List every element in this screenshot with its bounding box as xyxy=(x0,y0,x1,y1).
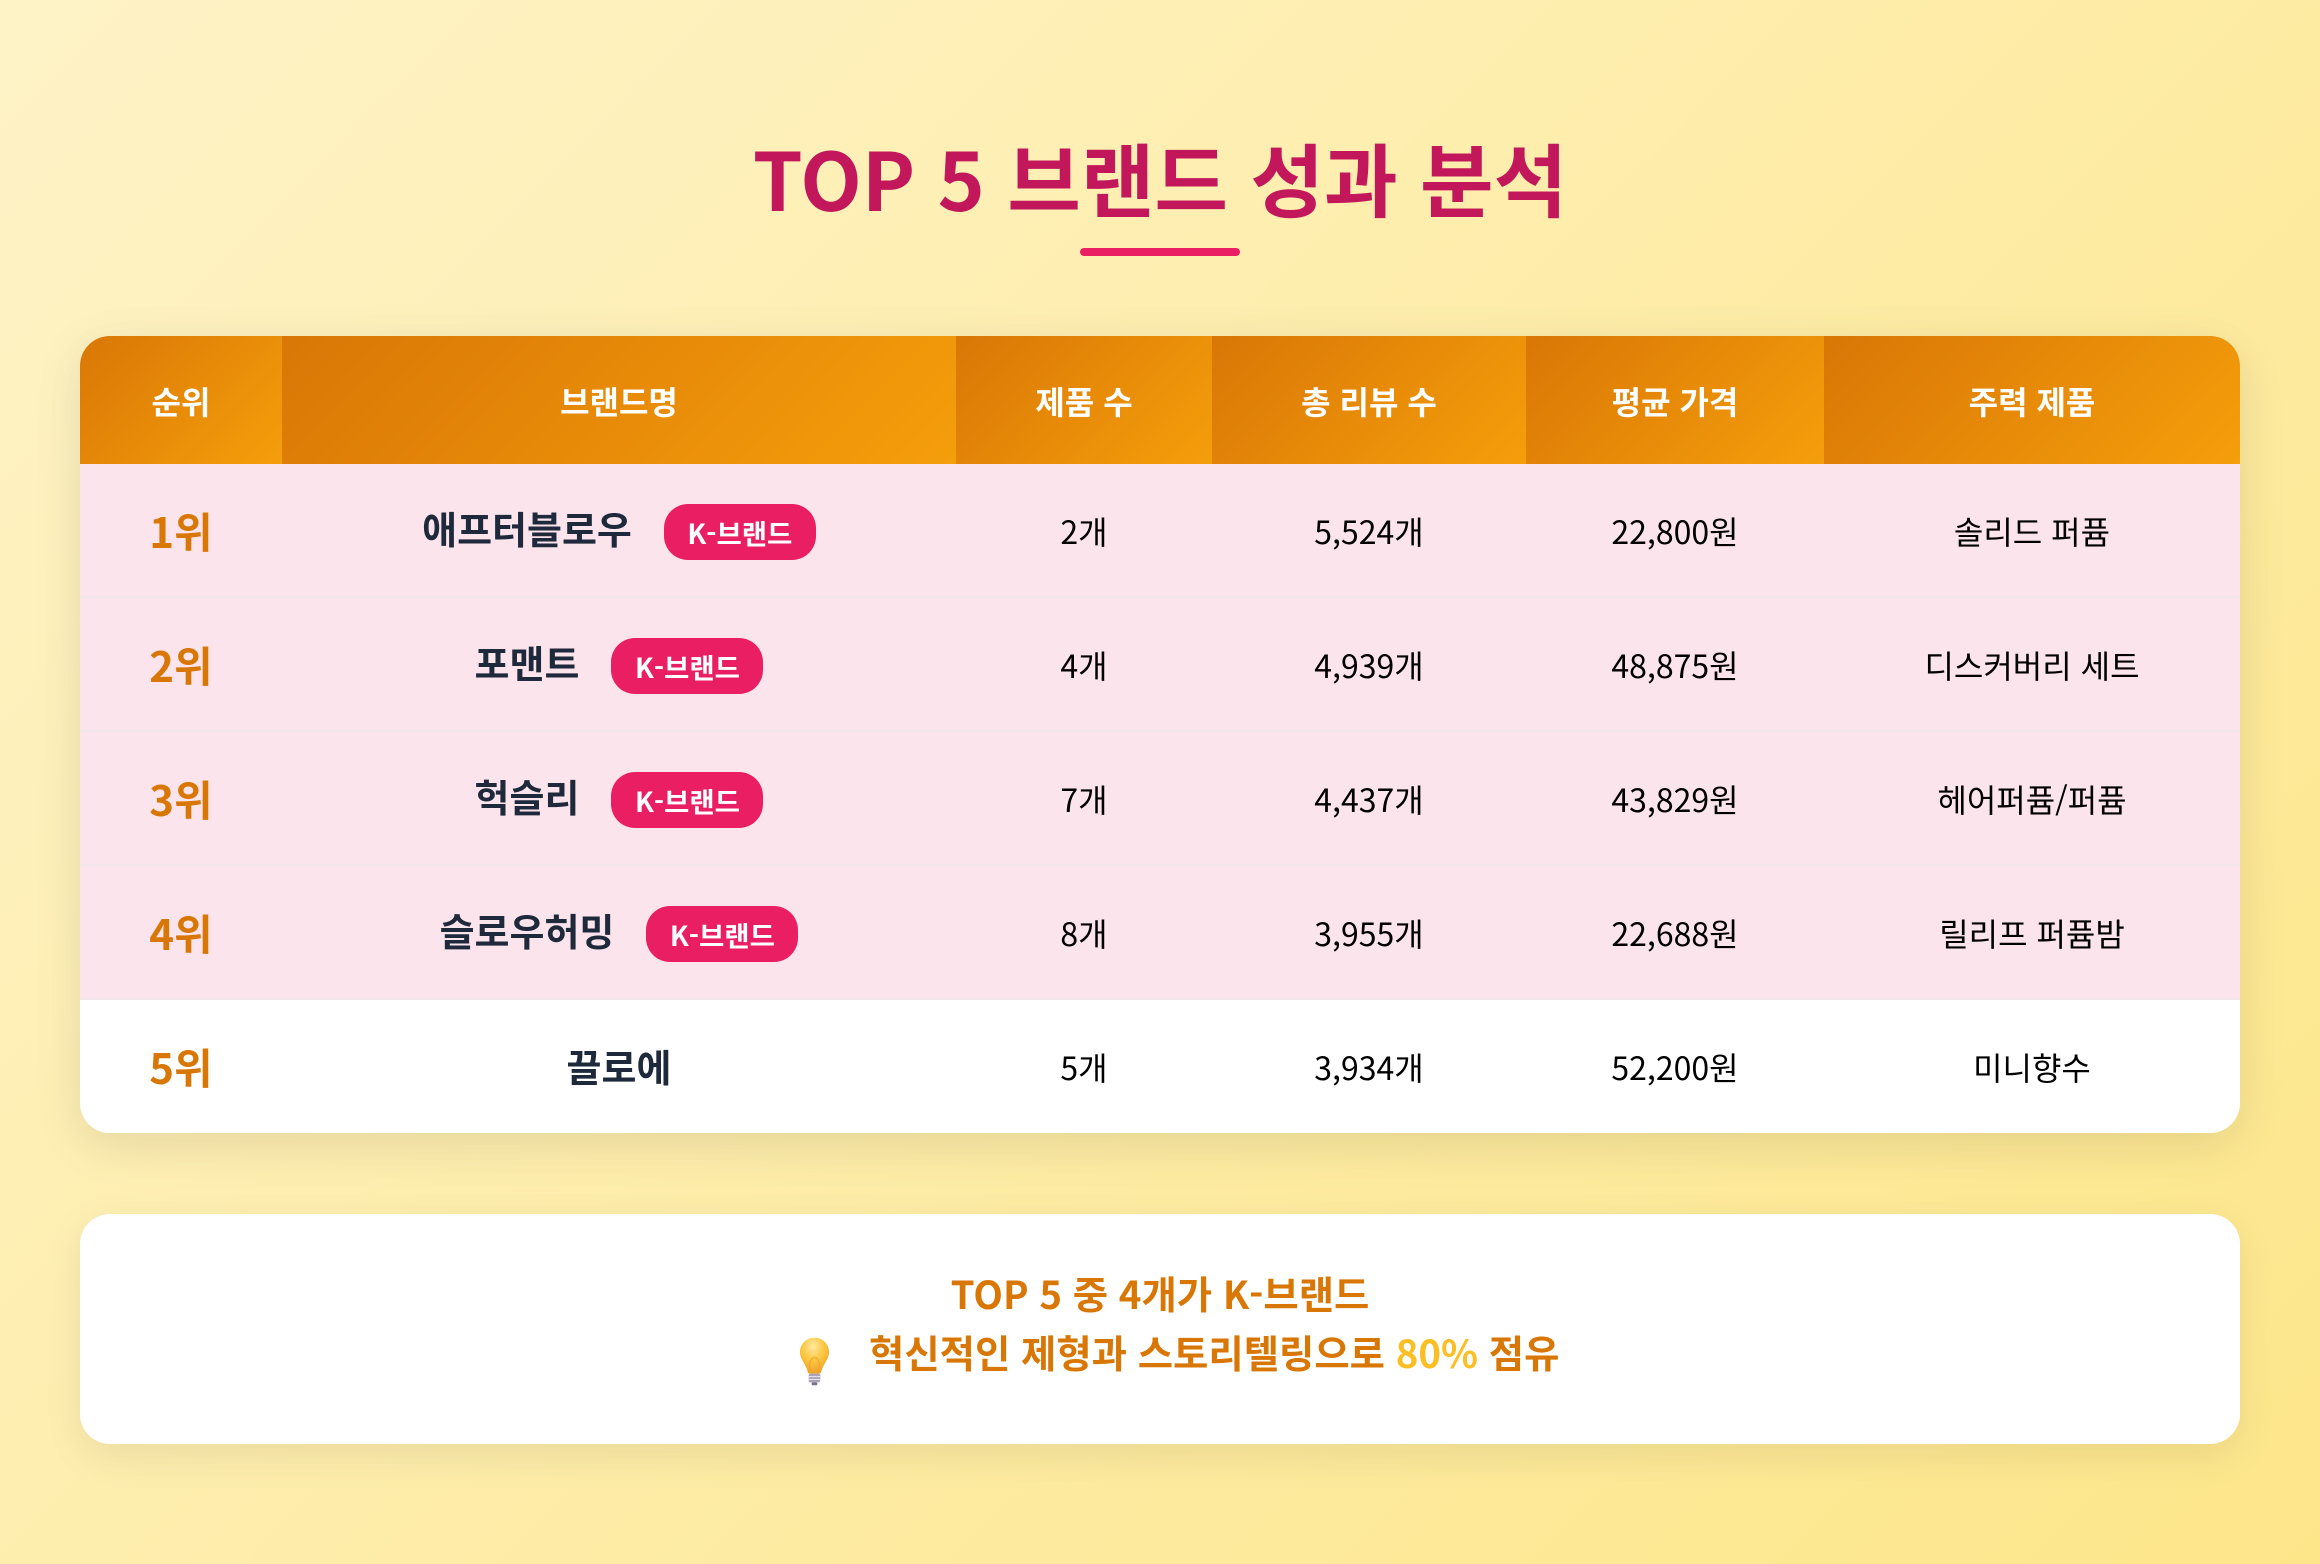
icon: light bulb xyxy=(800,1338,830,1386)
brand: huxley with K-brand badge: 헉슬리 xyxy=(475,768,579,822)
main product: 헤어퍼퓸/퍼퓸 xyxy=(1937,776,2127,822)
reviews: 4,437개 xyxy=(1314,776,1424,822)
row: rank 5 xyxy=(80,1000,2240,1134)
brand: formen with K-brand badge xyxy=(475,634,763,694)
header: rank xyxy=(80,336,282,464)
row: rank 4 xyxy=(80,866,2240,1000)
header: rank: 순위 xyxy=(152,378,210,424)
reviews: 5,524개 xyxy=(1314,508,1424,554)
products: 4개 xyxy=(1060,642,1108,688)
panel: insight callout xyxy=(80,1214,2240,1444)
reviews: 3,934개 xyxy=(1314,1044,1424,1090)
reviews: 4,939개 xyxy=(1314,642,1424,688)
header: total reviews xyxy=(1212,336,1526,464)
products: 7개 xyxy=(1060,776,1108,822)
title underline xyxy=(1080,248,1240,256)
price: 22,800원 xyxy=(1611,508,1739,554)
products: 5개 xyxy=(1060,1044,1108,1090)
header: brand name xyxy=(282,336,956,464)
brand: slow humming with K-brand badge: 슬로우허밍 xyxy=(440,902,614,956)
rank 4: 4위 xyxy=(149,902,213,962)
main product: 디스커버리 세트 xyxy=(1924,642,2140,688)
row: rank 3 xyxy=(80,732,2240,866)
brand: huxley with K-brand badge: K-브랜드 xyxy=(635,780,740,820)
brand: after blow with K-brand badge xyxy=(422,500,816,560)
brand: huxley with K-brand badge xyxy=(475,768,763,828)
rank 2: 2위 xyxy=(149,634,213,694)
price: 43,829원 xyxy=(1611,776,1739,822)
price: 48,875원 xyxy=(1611,642,1739,688)
main product: 솔리드 퍼퓸 xyxy=(1954,508,2110,554)
header: product count xyxy=(956,336,1212,464)
brand: slow humming with K-brand badge xyxy=(440,902,798,962)
rank 1: 1위 xyxy=(149,500,213,560)
callout line 1: TOP 5 중 4개가 K-브랜드 xyxy=(951,1265,1369,1321)
table header row xyxy=(80,336,2240,464)
brand: formen with K-brand badge: K-브랜드 xyxy=(635,646,740,686)
main product: 미니향수 xyxy=(1973,1044,2091,1090)
header: main product: 주력 제품 xyxy=(1969,378,2095,424)
brand: formen with K-brand badge: 포맨트 xyxy=(475,634,579,688)
brand: after blow with K-brand badge: K-브랜드 xyxy=(687,512,792,552)
rank 5: 5위 xyxy=(149,1036,213,1096)
panel: brand ranking table xyxy=(80,336,2240,1133)
header: average price: 평균 가격 xyxy=(1612,378,1738,424)
row: rank 1 xyxy=(80,464,2240,598)
callout line 2: 혁신적인 제형과 스토리텔링으로 80% 점유 xyxy=(869,1324,1559,1380)
products: 8개 xyxy=(1060,910,1108,956)
brand: after blow with K-brand badge: 애프터블로우 xyxy=(422,500,632,554)
price: 52,200원 xyxy=(1611,1044,1739,1090)
price: 22,688원 xyxy=(1611,910,1739,956)
main product: 릴리프 퍼퓸밤 xyxy=(1939,910,2125,956)
table shadow xyxy=(80,336,2240,1133)
header: main product xyxy=(1824,336,2240,464)
reviews: 3,955개 xyxy=(1314,910,1424,956)
title: TOP 5 브랜드 성과 분석 xyxy=(753,119,1567,235)
header: total reviews: 총 리뷰 수 xyxy=(1301,378,1437,424)
brand: kkeuloe: 끌로에 xyxy=(567,1038,671,1092)
header: average price xyxy=(1526,336,1824,464)
brand: slow humming with K-brand badge: K-브랜드 xyxy=(670,914,775,954)
header: brand name: 브랜드명 xyxy=(560,378,678,424)
products: 2개 xyxy=(1060,508,1108,554)
row: rank 2 xyxy=(80,598,2240,732)
rank 3: 3위 xyxy=(149,768,213,828)
header: product count: 제품 수 xyxy=(1035,378,1133,424)
